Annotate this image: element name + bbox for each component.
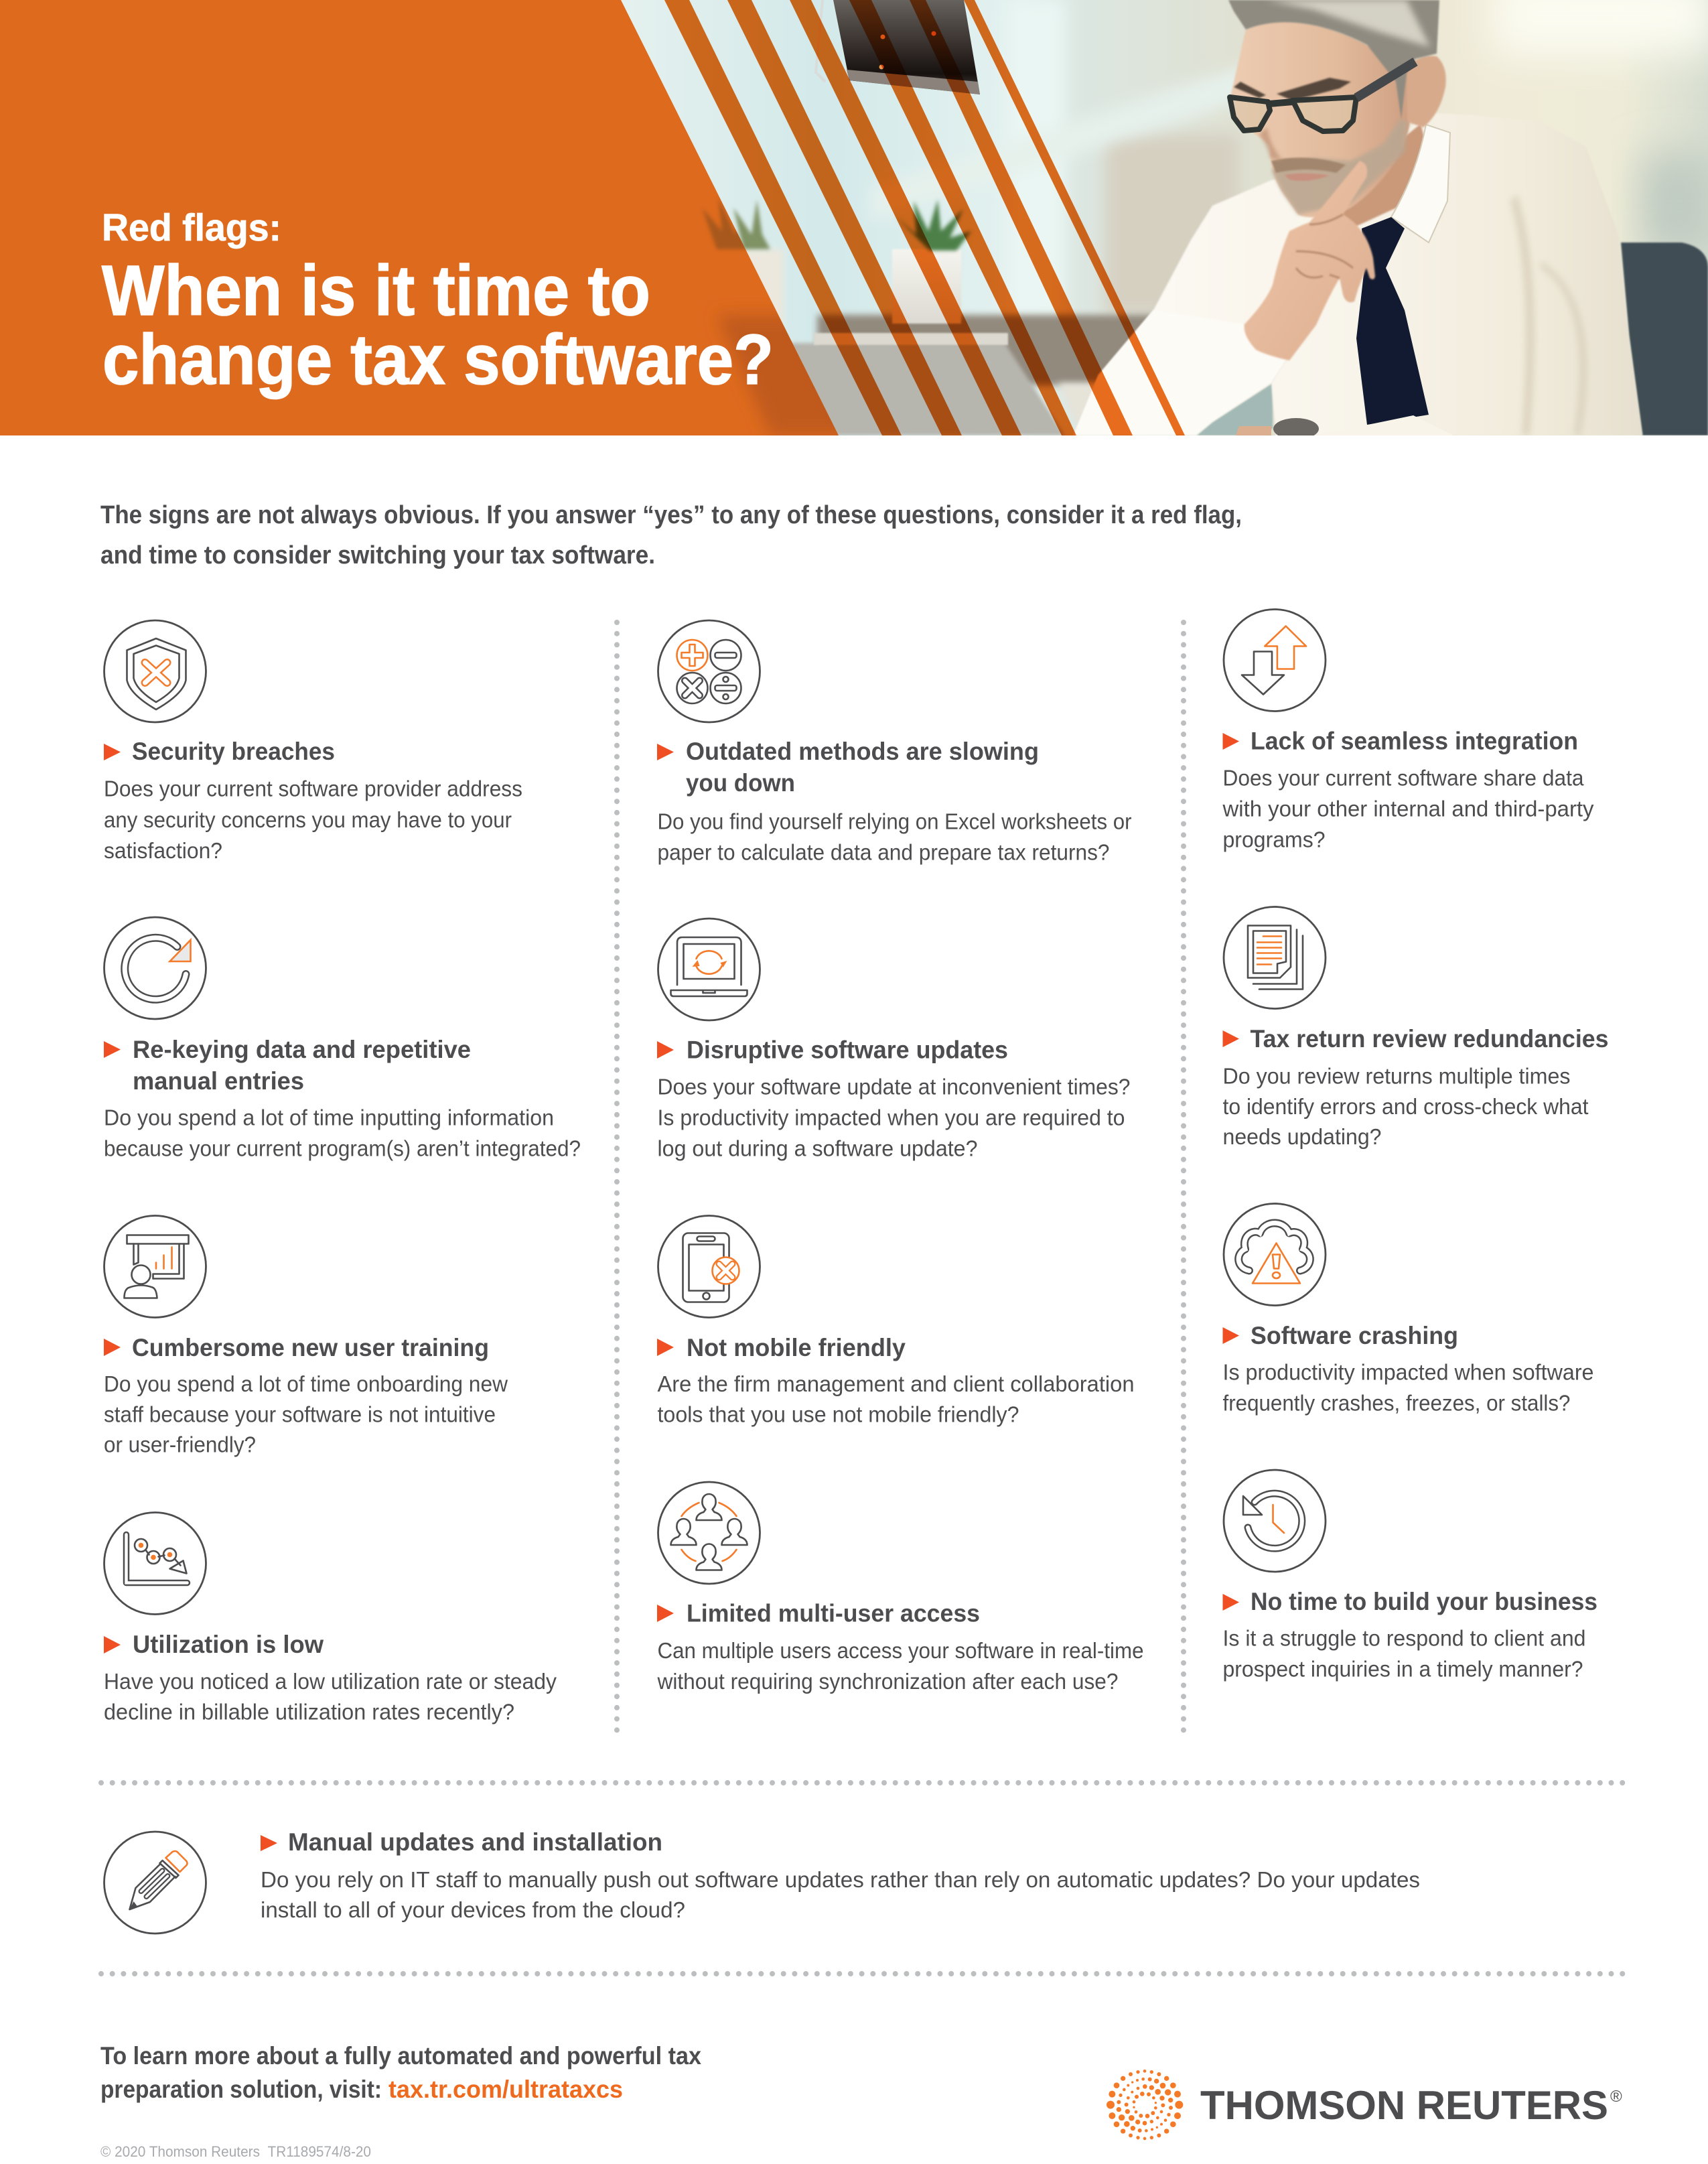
panel: utilization is low: Utilization is low [133, 1631, 324, 1658]
horizontal dividers [101, 1783, 1625, 1974]
body text [261, 1868, 1420, 1923]
panel: software crashing: Software crashing [1251, 1322, 1458, 1349]
heading: title block: Red flags: [102, 206, 281, 249]
panel: outdated methods [657, 620, 1132, 866]
panel: manual updates and installation [104, 1828, 1420, 1934]
logo mark: dotted sphere [1107, 2070, 1183, 2140]
icon: pencil [104, 1832, 206, 1934]
body text: satisfaction? [104, 839, 222, 864]
body text: programs? [1223, 828, 1325, 852]
decorative orange stripes [664, 0, 1185, 435]
sub: hand [1244, 161, 1375, 360]
icon: math operators [658, 620, 760, 722]
body text: staff because your software is not intuitive [104, 1403, 496, 1427]
panel: security breaches [104, 620, 522, 864]
body text: install to all of your devices from the cloud? [261, 1898, 685, 1923]
body text: Is productivity impacted when you are required to [658, 1105, 1125, 1131]
body text [104, 1670, 557, 1725]
sub: face [1231, 21, 1410, 217]
panel: orange title field [0, 0, 839, 435]
logo: Thomson Reuters [1107, 2070, 1622, 2140]
body text: frequently crashes, freezes, or stalls? [1223, 1391, 1570, 1416]
body text: prospect inquiries in a timely manner? [1223, 1658, 1583, 1682]
body text [658, 1075, 1131, 1162]
body text [104, 1105, 581, 1162]
icon: shield with x [104, 620, 206, 722]
logo: Thomson Reuters: ® [1610, 2088, 1622, 2106]
body text [658, 1372, 1135, 1427]
panel: re-keying data: manual entries [133, 1067, 304, 1095]
logo: Thomson Reuters: THOMSON REUTERS [1200, 2083, 1608, 2128]
body text: Is productivity impacted when software [1223, 1360, 1594, 1385]
sub: eyebrows [1234, 78, 1351, 100]
panel: no time to build business [1223, 1470, 1597, 1682]
header banner with photo [0, 0, 1708, 439]
body text: log out during a software update? [658, 1136, 978, 1162]
icon: stacked documents [1224, 907, 1326, 1009]
body text: Do you find yourself relying on Excel worksheets or [658, 809, 1132, 835]
body text: Do you review returns multiple times [1223, 1064, 1570, 1089]
panel: disruptive updates: Disruptive software updates [687, 1036, 1008, 1064]
panel: cumbersome training [104, 1215, 508, 1458]
body text [657, 1639, 1144, 1694]
sub: beard [1271, 119, 1407, 214]
sub: wrist watch [1273, 418, 1319, 435]
body text: Do you spend a lot of time onboarding new [104, 1372, 508, 1397]
panel: software crashing [1223, 1203, 1594, 1416]
photo: pendant lamp [816, 0, 980, 94]
panel: cumbersome training: Cumbersome new user training [132, 1334, 489, 1361]
sub: ear [1407, 56, 1446, 127]
heading: title block: When is it time to [102, 251, 650, 330]
panel: limited multi-user access: Limited multi-user access [687, 1600, 980, 1627]
body text: without requiring synchronization after each use? [657, 1670, 1119, 1694]
body text [1223, 1064, 1589, 1150]
body text: Have you noticed a low utilization rate or steady [104, 1670, 557, 1694]
panel: re-keying data: Re-keying data and repetitive [133, 1036, 471, 1063]
body text: Does your software update at inconvenient times? [658, 1075, 1131, 1100]
sub: neck shadow [1342, 125, 1424, 226]
body text: Do you rely on IT staff to manually push out software updates rather than rely on automatic updates? Do your updates [261, 1868, 1420, 1893]
icon: up and down arrows [1224, 610, 1326, 712]
body text: to identify errors and cross-check what [1223, 1095, 1589, 1120]
body text: with your other internal and third-party [1222, 797, 1594, 821]
icon: declining chart [104, 1513, 206, 1615]
panel: security breaches: Security breaches [132, 738, 335, 765]
panel: not mobile friendly: Not mobile friendly [687, 1334, 906, 1361]
body text: Do you spend a lot of time inputting information [104, 1105, 554, 1131]
panel: tax return review redundancies [1223, 907, 1609, 1150]
photo: man [1074, 0, 1642, 439]
body text: needs updating? [1223, 1125, 1381, 1150]
panel: not mobile friendly [657, 1215, 1135, 1427]
intro text [100, 501, 1242, 569]
icon: connected users [658, 1482, 760, 1584]
body text [1222, 766, 1594, 852]
body text: Can multiple users access your software in real-time [658, 1639, 1144, 1664]
body text [104, 1372, 508, 1458]
panel: lack of seamless integration [1222, 610, 1594, 852]
icon: phone with x [658, 1215, 760, 1317]
sub: hair [1228, 0, 1439, 119]
heading: title block: change tax software? [102, 320, 774, 399]
body text: or user-friendly? [104, 1432, 256, 1458]
column dividers [617, 622, 1184, 1737]
body text [104, 777, 522, 864]
panel: tax return review redundancies: Tax return review redundancies [1250, 1025, 1609, 1053]
body text: paper to calculate data and prepare tax returns? [658, 840, 1109, 866]
call to action: To learn more about a fully automated and powerful tax [100, 2042, 701, 2070]
heading: title block [102, 206, 774, 399]
body text: because your current program(s) aren’t integrated? [104, 1136, 581, 1162]
panel: limited multi-user access [657, 1482, 1144, 1694]
panel: outdated methods: Outdated methods are slowing [686, 738, 1039, 765]
body text: Are the firm management and client collaboration [658, 1372, 1135, 1397]
icon: cloud with warning triangle [1224, 1203, 1326, 1305]
panel: utilization is low [104, 1513, 557, 1725]
intro text: and time to consider switching your tax software. [100, 541, 655, 569]
photo: chair [1621, 243, 1708, 435]
icon: presenter with chart [104, 1215, 206, 1317]
panel: manual updates and installation: Manual updates and installation [288, 1828, 662, 1856]
body text [1223, 1627, 1586, 1682]
panel: outdated methods: you down [686, 769, 795, 797]
body text: any security concerns you may have to your [104, 808, 512, 833]
body text: tools that you use not mobile friendly? [658, 1403, 1019, 1427]
body text: Is it a struggle to respond to client and [1223, 1627, 1586, 1651]
body text [658, 809, 1132, 866]
icon: refresh arrow [104, 917, 206, 1019]
icon: clock with reverse arrow [1224, 1470, 1326, 1572]
call to action: preparation solution, visit: [100, 2076, 382, 2103]
body text [1223, 1360, 1594, 1416]
panel: no time to build business: No time to build your business [1251, 1588, 1597, 1615]
body text: decline in billable utilization rates recently? [104, 1700, 514, 1725]
icon: laptop with sync arrows [658, 919, 760, 1020]
panel: disruptive updates [657, 919, 1131, 1162]
call to action [100, 2042, 701, 2103]
panel: lack of seamless integration: Lack of seamless integration [1251, 728, 1578, 754]
body text: Does your current software provider address [104, 777, 522, 801]
intro text: The signs are not always obvious. If you answer “yes” to any of these questions, consider it a red flag, [100, 501, 1242, 529]
photo: office background [603, 0, 1708, 435]
copyright line: © 2020 Thomson Reuters TR1189574/8-20 [100, 2143, 371, 2160]
panel: re-keying data [104, 917, 581, 1162]
sub: glasses [1230, 97, 1270, 131]
call to action: tax.tr.com/ultrataxcs [388, 2076, 623, 2103]
body text: Does your current software share data [1223, 766, 1584, 791]
